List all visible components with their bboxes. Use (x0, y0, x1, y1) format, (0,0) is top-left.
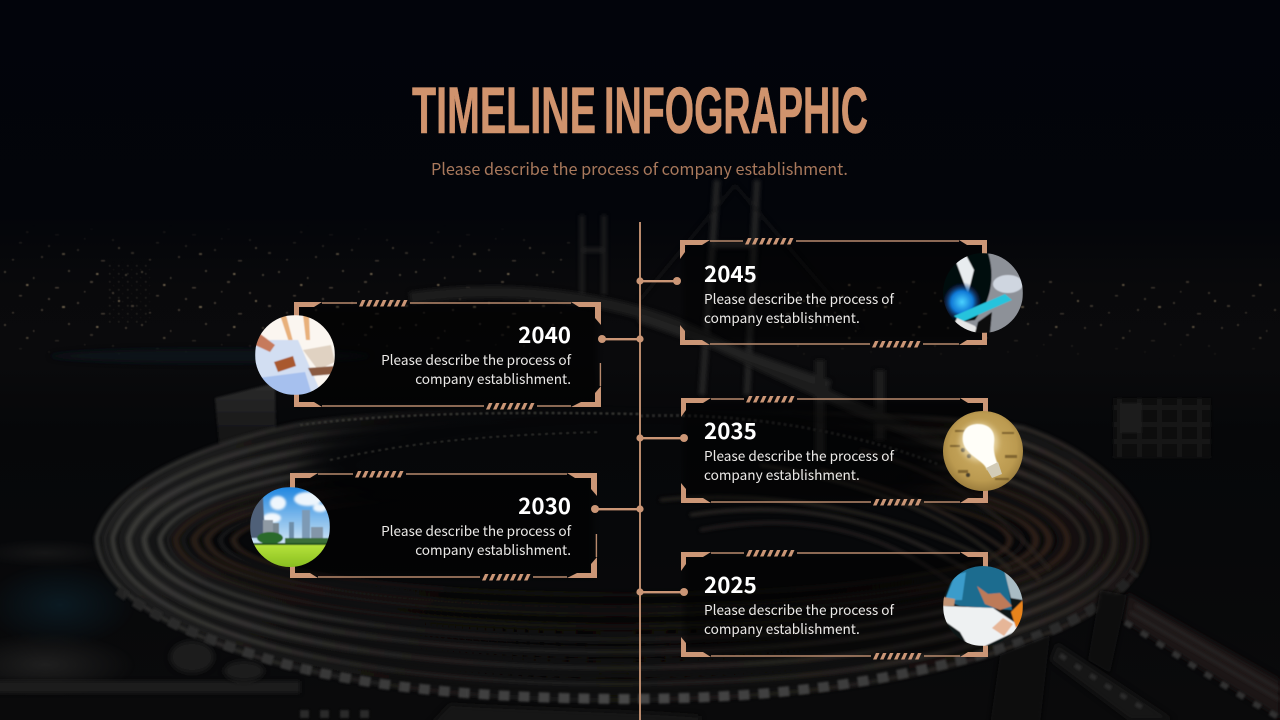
ring road (97, 410, 1146, 700)
photo: people at a desk with papers (943, 565, 1023, 646)
left water and shore glow (0, 563, 135, 647)
description 2040: Please describe the process of (381, 349, 572, 369)
year 2035: 2035 (704, 414, 757, 446)
background: night city and ring road (0, 179, 1280, 720)
photo: skyline and green lawn (250, 487, 330, 569)
year 2045: 2045 (704, 257, 757, 289)
right-side merging streaks (660, 450, 1050, 590)
frame 2045 (680, 238, 987, 348)
title (412, 73, 868, 147)
connector 2045 (636, 277, 681, 285)
photo: hand holding glowing tablet (942, 253, 1023, 333)
photo: light bulb on gold paper (943, 411, 1023, 491)
frame 2035 (681, 396, 988, 506)
year 2040: 2040 (518, 318, 571, 350)
city skyline (0, 225, 1280, 363)
description 2045: Please describe the process of (704, 288, 894, 308)
milestone 2040 (255, 300, 644, 410)
frame 2040 (294, 300, 601, 410)
connector 2035 (636, 434, 688, 442)
milestone 2025 (636, 550, 1023, 660)
year 2025: 2025 (704, 568, 757, 600)
waterfront building (215, 383, 276, 445)
bridge pylons (582, 180, 860, 395)
road top structure (300, 413, 940, 465)
description 2030: Please describe the process of (381, 520, 572, 540)
connector 2030 (591, 505, 644, 513)
elevated road from bridge (410, 292, 960, 460)
description 2025: company establishment. (704, 618, 860, 638)
frame 2030 (290, 471, 597, 580)
connector 2040 (598, 335, 644, 343)
title: INFOGRAPHIC (604, 73, 868, 147)
milestone 2030 (250, 471, 644, 580)
description 2035: Please describe the process of (704, 445, 894, 465)
connector 2025 (636, 588, 688, 596)
year 2030: 2030 (518, 489, 571, 521)
timeline axis (639, 222, 641, 720)
right building (1113, 398, 1211, 458)
description 2040: company establishment. (415, 368, 571, 388)
lower left road and blocks (0, 681, 300, 693)
description 2035: company establishment. (704, 464, 860, 484)
lower right road (1123, 593, 1280, 720)
frame 2025 (681, 550, 988, 660)
description 2045: company establishment. (704, 307, 860, 327)
guardrail lights (118, 572, 1135, 699)
description 2030: company establishment. (415, 539, 571, 559)
milestone 2035 (636, 396, 1023, 506)
title: TIMELINE (412, 73, 596, 147)
description 2025: Please describe the process of (704, 599, 894, 619)
photo: hands over documents (255, 315, 335, 395)
milestone 2045 (636, 238, 1023, 348)
subtitle: Please describe the process of company establishment. (431, 156, 848, 180)
